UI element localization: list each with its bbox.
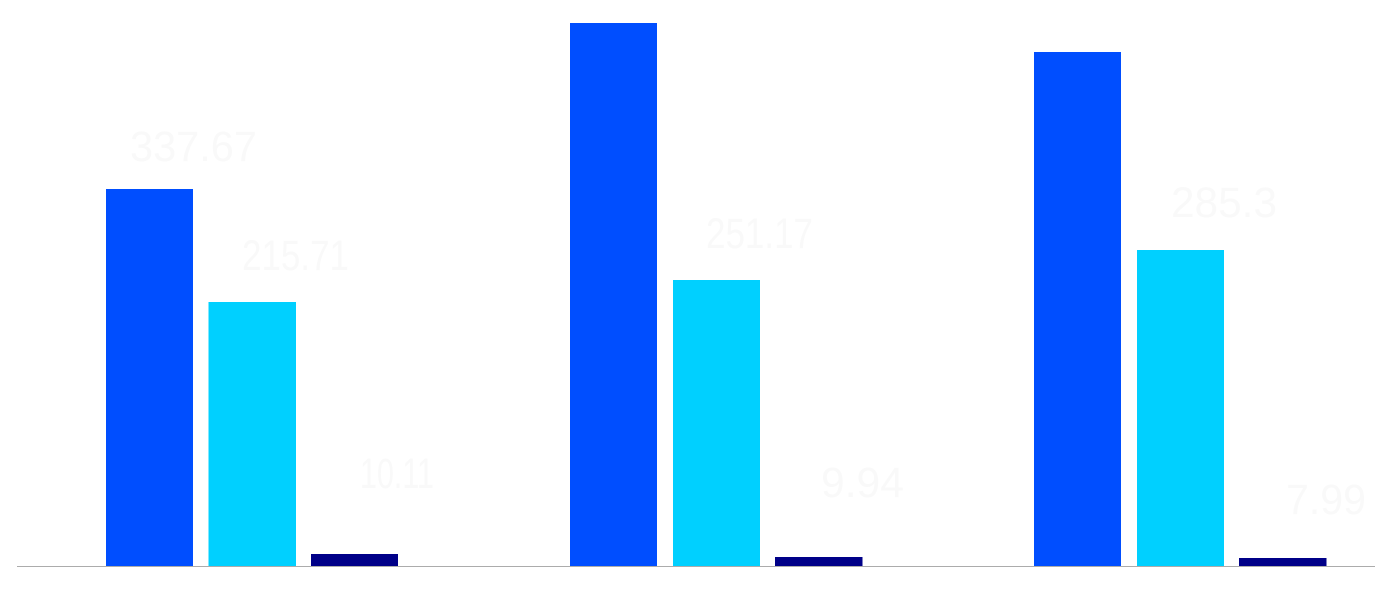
value label 337.67: 337.67	[130, 123, 257, 171]
bar: group 2 series 3	[775, 557, 862, 566]
value label 251.17: 251.17	[706, 210, 813, 258]
value label 10.11: 10.11	[360, 450, 434, 498]
bar: group 2 series 2	[673, 280, 760, 566]
value label 215.71: 215.71	[242, 232, 349, 280]
baseline axis	[17, 566, 1375, 567]
bar: group 3 series 3	[1239, 558, 1326, 566]
value label 9.94: 9.94	[821, 459, 904, 507]
bar: group 1 series 3	[311, 554, 398, 566]
bar: group 2 series 1	[570, 23, 657, 566]
group 3 bars and values	[1034, 52, 1366, 566]
group 2 bars and values	[570, 23, 904, 566]
group 1 bars and values	[106, 123, 434, 566]
bar: group 3 series 2	[1137, 250, 1224, 566]
value label 7.99: 7.99	[1286, 476, 1366, 524]
bar: group 1 series 1	[106, 189, 193, 566]
bar: group 1 series 2	[208, 302, 296, 566]
bar: group 3 series 1	[1034, 52, 1121, 566]
value label 285.3: 285.3	[1171, 179, 1277, 227]
